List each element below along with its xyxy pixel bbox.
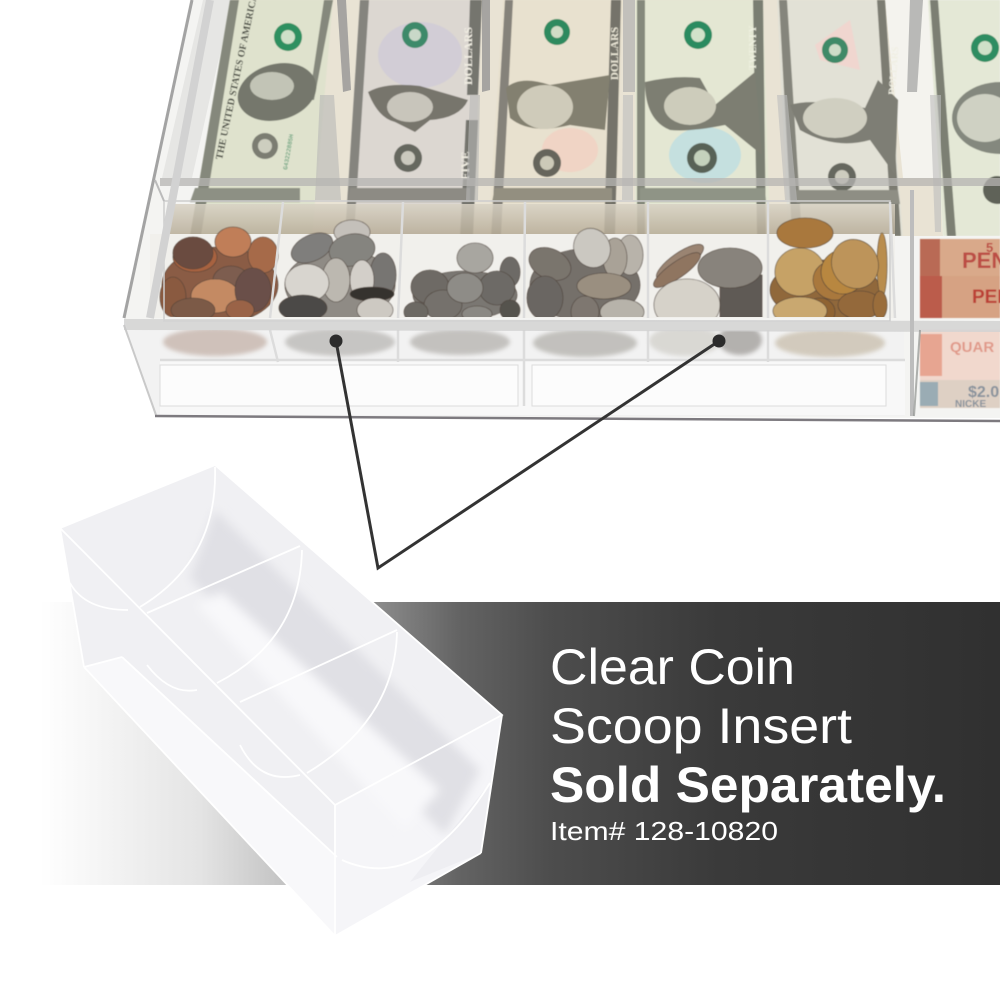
coins: dimes [404, 243, 520, 322]
bill: one dollar: G43222885H [282, 133, 295, 170]
tray rim and outer walls [124, 0, 1000, 421]
roll: nickels reflection: NICKE [955, 399, 986, 410]
roll: quarters reflection [920, 330, 1000, 380]
bill: five dollars: DOLLARS [461, 27, 475, 85]
bill: ten dollars: DOLLARS [609, 27, 621, 80]
scoop curve three [307, 632, 397, 773]
tray cross bar [160, 178, 1000, 186]
bill: fifty dollars: DOLLARS [887, 46, 901, 95]
roll: pennies upper: 5 [986, 240, 993, 255]
caption line: item number: Item# 128-10820 [550, 816, 778, 846]
bill: five dollars [345, 0, 482, 236]
caption line: Sold Separately: Sold Separately. [550, 757, 946, 813]
roll: pennies upper [920, 239, 1000, 276]
trough shading [190, 510, 480, 835]
cash bills [190, 0, 1000, 236]
scoop curve front [342, 783, 490, 868]
roll: quarters reflection: QUAR [950, 339, 994, 356]
photo: coin and bill tray [124, 0, 1000, 421]
coin rolls [920, 239, 1000, 410]
white gap right of fifty [885, 0, 942, 178]
bill: hundred dollars [928, 0, 1000, 236]
bill: fifty dollars [777, 0, 903, 236]
callout dot: right scoop [712, 334, 726, 348]
coin wells [158, 217, 888, 317]
insert body [60, 465, 502, 936]
roll: nickels reflection [920, 380, 1000, 410]
right side face [335, 715, 502, 936]
clear bill dividers [315, 0, 941, 232]
open top [60, 465, 502, 805]
insert edges [60, 465, 502, 936]
caption line: Clear Coin: Clear Coin [550, 639, 795, 695]
roll: nickels reflection: $2.0 [968, 384, 999, 401]
photo: clear coin scoop insert [60, 465, 502, 936]
bill: twenty dollars: TWENTY [748, 25, 759, 70]
caption line: Scoop Insert: Scoop Insert [550, 698, 852, 754]
scoop curve one [140, 467, 215, 607]
bill stack backing [190, 0, 943, 236]
frosted left wall [162, 0, 232, 178]
coins: quarters [526, 227, 646, 317]
tray floor [124, 0, 1000, 418]
coin compartment backing [150, 234, 895, 318]
coins: nickels [279, 220, 396, 322]
dark gradient banner [0, 602, 1000, 885]
scoop curve left [70, 583, 128, 610]
coins: pennies [160, 227, 278, 323]
callout dot: left scoop [330, 334, 342, 348]
coin reflections in front panel [162, 330, 886, 358]
product caption [550, 639, 946, 846]
roll: pennies lower [920, 276, 1000, 318]
scoop curve two [217, 550, 302, 683]
bill stack edges [168, 204, 895, 236]
coins: half dollars [652, 243, 764, 317]
bill: ten dollars [488, 0, 623, 236]
left upper strip [60, 528, 337, 857]
trough highlight [197, 592, 440, 830]
bill: five dollars: FIVE [458, 151, 472, 180]
compartment dividers [160, 201, 905, 406]
tray front wall [126, 330, 905, 416]
bill: one dollar [190, 0, 333, 236]
coins: gold dollars [770, 218, 887, 326]
bill: twenty dollars [635, 0, 770, 236]
leader lines to coin scoops [330, 334, 726, 568]
